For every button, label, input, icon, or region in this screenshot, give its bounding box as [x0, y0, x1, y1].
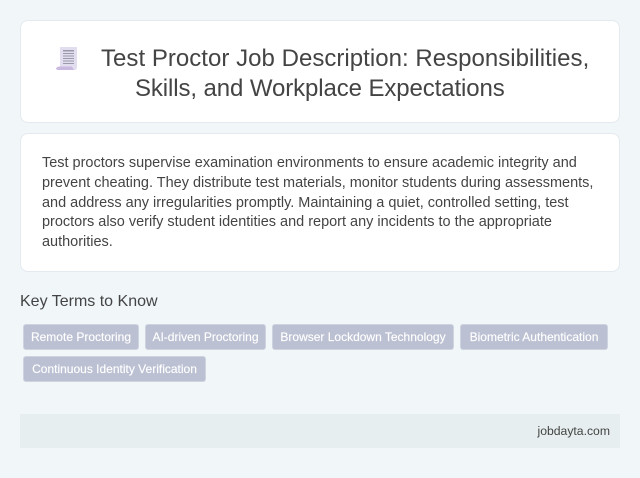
- tag: continuous identity verification: Continuous Identity Verification: [32, 362, 197, 376]
- footer bar: [20, 414, 620, 448]
- tag: browser lockdown technology: [272, 324, 454, 350]
- tag: biometric authentication: Biometric Authentication: [470, 330, 598, 344]
- panel: description: [20, 133, 620, 272]
- icon: paper scroll document: [56, 47, 77, 70]
- heading: title: [101, 45, 589, 102]
- footer text: site name: jobdayta.com: [538, 424, 610, 438]
- text block: description paragraph: Test proctors supervise examination environments to ensure academic integrity and: [42, 155, 577, 171]
- text block: description paragraph: and address any irregularities promptly. Maintaining a quiet, controlled setting, test: [42, 195, 569, 211]
- tag: remote proctoring: Remote Proctoring: [31, 330, 131, 344]
- text block: description paragraph: authorities.: [42, 234, 113, 250]
- tag list: key terms: [23, 324, 608, 382]
- text block: description paragraph: proctors also verify student identities and report any incidents to the appropriate: [42, 214, 552, 230]
- text block: description paragraph: [42, 155, 593, 250]
- tag: AI-driven proctoring: AI-driven Proctoring: [152, 330, 259, 344]
- heading: title: Test Proctor Job Description: Responsibilities,: [101, 45, 589, 72]
- tag: remote proctoring: [23, 324, 139, 350]
- tag: AI-driven proctoring: [145, 324, 266, 350]
- tag: biometric authentication: [460, 324, 608, 350]
- heading: key terms: Key Terms to Know: [20, 293, 158, 310]
- text block: description paragraph: prevent cheating. They distribute test materials, monitor students during assessments,: [42, 175, 593, 191]
- panel: title header: [20, 20, 620, 123]
- heading: title: Skills, and Workplace Expectations: [135, 75, 505, 102]
- tag: continuous identity verification: [23, 356, 206, 382]
- tag: browser lockdown technology: Browser Lockdown Technology: [280, 330, 446, 344]
